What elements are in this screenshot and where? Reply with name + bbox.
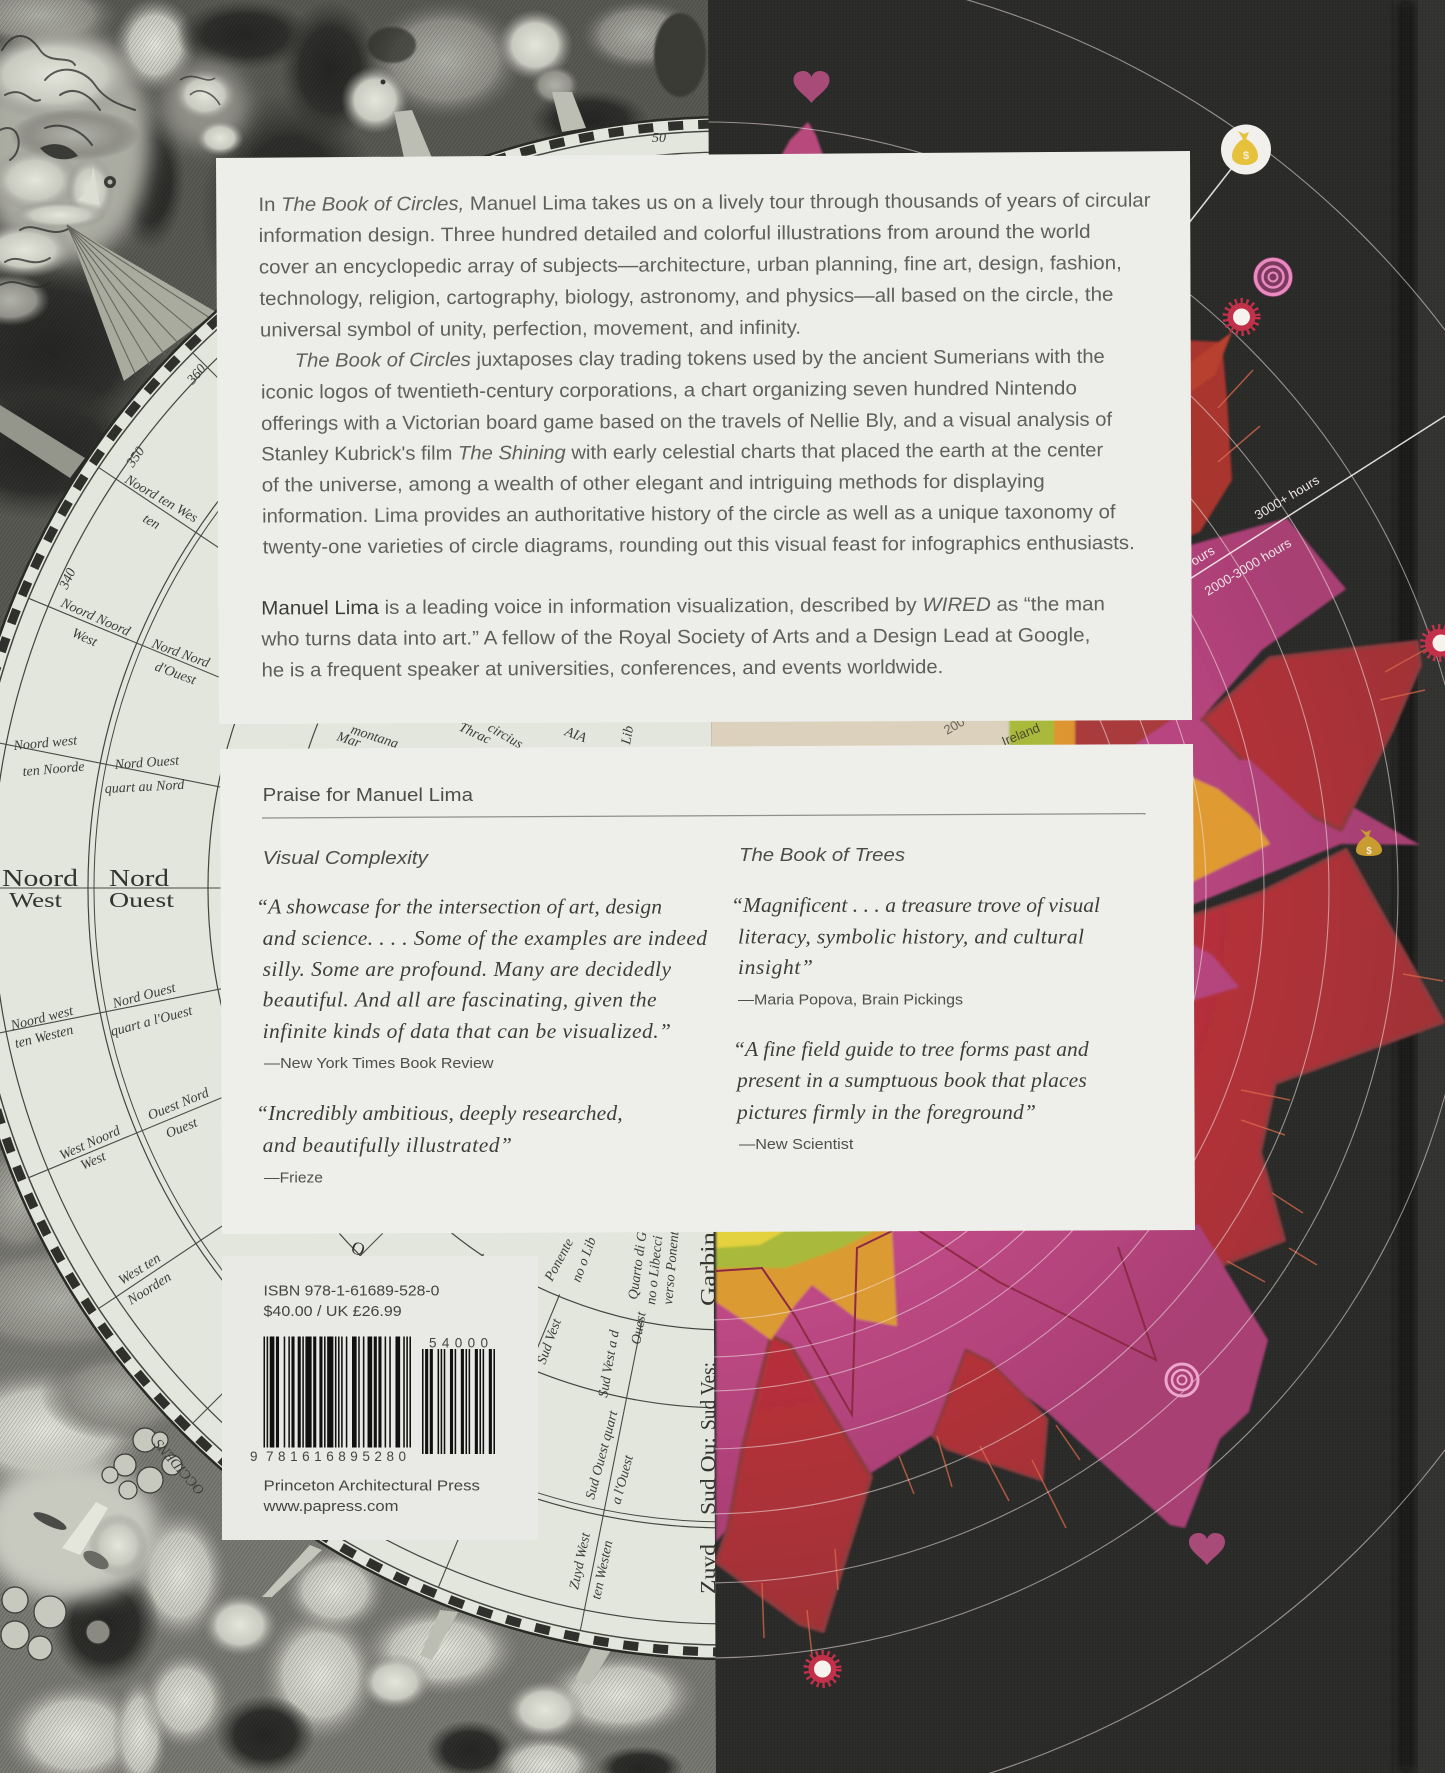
column: Visual Complexity: beautiful. And all are fascinating, given the <box>263 988 657 1012</box>
text: ISBN and price: ISBN 978-1-61689-528-0 <box>264 1282 439 1300</box>
column: Visual Complexity: Visual Complexity <box>263 847 430 868</box>
icon: heart bottom <box>1189 1533 1225 1565</box>
axis lines <box>1185 150 1445 582</box>
map labels: Nord Nord <box>149 636 212 672</box>
text: publisher <box>262 1478 480 1515</box>
text block: book description: cover an encyclopedic array of subjects—architecture, urban planning, fine art, design, fashion, <box>259 252 1122 278</box>
map labels: verso Ponente <box>661 1225 683 1305</box>
map labels: West <box>69 626 100 651</box>
flowers <box>1 1428 182 1660</box>
column: The Book of Trees: pictures firmly in the foreground” <box>735 1100 1036 1124</box>
map labels: Sud Vest <box>535 1316 565 1366</box>
wind beams <box>0 92 586 478</box>
map labels: Zuyd <box>696 1543 720 1594</box>
map labels: Ouest <box>109 888 174 912</box>
icon: heart top <box>794 71 830 103</box>
column: Visual Complexity: infinite kinds of data that can be visualized.” <box>263 1019 671 1043</box>
map labels: Nord <box>109 866 169 892</box>
map labels: Noord ten Wes <box>121 472 200 526</box>
map labels: no o Lib <box>570 1235 600 1284</box>
map labels: Noord west <box>12 733 79 754</box>
column: The Book of Trees: present in a sumptuous book that places <box>735 1068 1087 1092</box>
barcode: 54000 <box>429 1336 488 1350</box>
map labels: d'Ouest <box>153 660 199 689</box>
column: The Book of Trees: literacy, symbolic history, and cultural <box>738 925 1084 949</box>
column: The Book of Trees: —Maria Popova, Brain Pickings <box>738 993 963 1009</box>
map labels: AIA <box>562 724 589 746</box>
icon: money bag right <box>1356 829 1382 857</box>
pink small tip <box>1180 938 1239 1004</box>
map labels: Sud Ves: <box>696 1362 720 1430</box>
red lower right petal <box>1180 850 1443 1265</box>
text block: book description: of the universe, among a wealth of other elegant and intriguing methods for displaying <box>262 471 1045 496</box>
petal chart <box>708 0 1445 1773</box>
third face <box>341 27 416 134</box>
column: Visual Complexity: “Incredibly ambitious, deeply researched, <box>256 1101 623 1125</box>
column: Visual Complexity: —New York Times Book Review <box>264 1056 494 1072</box>
map labels: a l'Ouest <box>609 1453 637 1506</box>
map labels: ten Westen <box>13 1023 75 1052</box>
big wind god face <box>0 30 150 326</box>
map labels: Sud Vest a d <box>596 1328 623 1399</box>
icon: money bag in white circle <box>1221 124 1271 174</box>
map labels: 360 <box>184 362 210 388</box>
fifth face <box>654 13 706 97</box>
lower face <box>0 1460 158 1600</box>
column: The Book of Trees: The Book of Trees <box>739 844 905 865</box>
map labels: no o Libecci <box>644 1235 666 1305</box>
small lower faces <box>202 1545 620 1740</box>
column: The Book of Trees: “Magnificent . . . a treasure trove of visual <box>731 893 1100 917</box>
hours labels <box>941 472 1322 749</box>
map labels: quart au Nord <box>104 778 186 797</box>
column: Visual Complexity: silly. Some are profound. Many are decidedly <box>263 957 671 981</box>
green base <box>716 1228 880 1268</box>
text block: book description: information design. Three hundred detailed and colorful illustrations from around the world <box>259 221 1091 247</box>
text block: author bio <box>260 593 1105 682</box>
map labels <box>2 131 720 1601</box>
text block: book description: Stanley Kubrick's film The Shining with early celestial charts that placed the earth at the center <box>261 439 1104 465</box>
concentric rings <box>708 0 1445 1773</box>
map labels: Zuyd West <box>567 1530 594 1591</box>
text block: author bio: Manuel Lima is a leading voice in information visualization, described by WIRED as “the man <box>261 593 1105 619</box>
column: The Book of Trees: —New Scientist <box>739 1137 853 1153</box>
map labels: Ponente <box>542 1236 577 1285</box>
text: publisher: www.papress.com <box>262 1498 398 1515</box>
text block: book description: twenty-one varieties of circle diagrams, rounding out this visual feast for infographics enthusiasts. <box>263 532 1135 558</box>
map labels: Ouest <box>629 1310 650 1346</box>
map labels: Sud Ou: <box>696 1437 720 1515</box>
column: The Book of Trees: insight” <box>738 955 813 979</box>
text block: book description: offerings with a Victorian board game based on the travels of Nellie Bly, and a visual analysis of <box>261 409 1113 435</box>
column: Visual Complexity: and science. . . . Some of the examples are indeed <box>263 926 707 950</box>
map labels: quart a l'Ouest <box>109 1003 195 1040</box>
text block: book description: universal symbol of unity, perfection, movement, and infinity. <box>260 317 801 341</box>
map labels: Ouest <box>164 1115 201 1142</box>
hours labels: Ireland <box>1000 720 1042 749</box>
column: The Book of Trees: “A fine field guide to tree forms past and <box>733 1037 1089 1061</box>
second face <box>163 63 247 156</box>
map labels: Nord Ouest <box>113 753 181 773</box>
map labels: Quarto di Gar <box>626 1218 652 1301</box>
pink top tip <box>780 122 824 158</box>
text: ISBN and price: $40.00 / UK £26.99 <box>264 1303 402 1320</box>
map strip colours <box>711 720 1182 746</box>
map labels: circius <box>485 720 526 753</box>
map labels: ten Noorde <box>22 760 85 780</box>
top clouds <box>0 0 700 520</box>
icon: starburst bottom <box>808 1655 836 1683</box>
map labels: 50 <box>652 131 666 146</box>
map labels: Noord Noord <box>57 596 133 640</box>
map labels: Ouest Nord <box>146 1085 212 1124</box>
text block: book description: The Book of Circles juxtaposes clay trading tokens used by the ancient Sumerians with the <box>295 346 1105 372</box>
text block: book description: information. Lima provides an authoritative history of the circle as well as a unique taxonomy of <box>262 501 1116 527</box>
hours labels: 200 <box>941 714 967 738</box>
icon: target lower <box>1166 1364 1198 1396</box>
icon: starburst top <box>1228 303 1256 331</box>
map labels: Thrac <box>456 720 494 748</box>
icon: starburst right <box>1425 629 1445 657</box>
orange base <box>716 1230 897 1340</box>
map labels: OCCIDENS <box>152 1436 208 1497</box>
barcode <box>250 1336 495 1464</box>
panel: praise <box>220 744 1195 1234</box>
pink wedge <box>1180 518 1420 910</box>
panel: ISBN and barcode <box>222 1256 538 1540</box>
map labels: Garbin <box>696 1231 720 1306</box>
icon: money bag right: $ <box>1366 846 1372 857</box>
hours labels: 2000-3000 hours <box>1202 535 1294 599</box>
hours labels: 3000+ hours <box>1252 472 1322 523</box>
heading: praise: Praise for Manuel Lima <box>263 784 474 805</box>
map labels: Lib <box>619 725 637 747</box>
map labels: West ten <box>116 1251 164 1288</box>
map labels: Nord Ouest <box>110 980 178 1012</box>
red petal right <box>1203 642 1420 830</box>
pink lower petal <box>716 1225 1268 1542</box>
map labels: montana <box>349 723 400 752</box>
text block: author bio: who turns data into art.” A fellow of the Royal Society of Arts and a Design Lead at Google, <box>260 624 1090 651</box>
spikes <box>762 370 1443 1655</box>
text block: book description: In The Book of Circles, Manuel Lima takes us on a lively tour through thousands of years of circular <box>258 189 1151 216</box>
text: publisher: Princeton Architectural Press <box>264 1478 480 1494</box>
map labels: Noord west <box>8 1004 76 1034</box>
map labels: 350 <box>123 444 148 471</box>
red upper petal <box>1190 339 1234 537</box>
fourth face <box>497 9 579 105</box>
red lower petal <box>716 1336 871 1631</box>
barcode: 9 <box>250 1449 258 1464</box>
column: Visual Complexity: and beautifully illustrated” <box>263 1133 512 1157</box>
text: ISBN and price <box>264 1282 439 1320</box>
barcode: 781616895280 <box>266 1449 406 1464</box>
icon: target top <box>1253 257 1293 297</box>
map labels: West <box>9 888 62 912</box>
map labels: 340 <box>57 566 80 593</box>
orange shape <box>1193 776 1271 883</box>
red middle petal <box>933 1350 1047 1480</box>
map labels: Noorden <box>124 1270 174 1309</box>
map labels: ten Westen <box>589 1539 616 1601</box>
text block: book description <box>258 189 1153 558</box>
engraving: wind gods and clouds <box>0 0 730 1773</box>
map labels: Sud Ouest quart <box>583 1408 622 1501</box>
map labels: Mar <box>334 729 363 751</box>
column: Visual Complexity <box>256 847 707 1186</box>
text block: book description: technology, religion, cartography, biology, astronomy, and physics—all based on the circle, the <box>259 284 1113 310</box>
map labels: ten <box>140 511 162 533</box>
text block: book description: iconic logos of twentieth-century corporations, a chart organizing seven hundred Nintendo <box>261 377 1077 403</box>
map labels: West <box>79 1149 109 1174</box>
hours labels: ours <box>1188 542 1218 569</box>
column: The Book of Trees <box>731 844 1100 1153</box>
column: Visual Complexity: “A showcase for the intersection of art, design <box>256 894 662 918</box>
map labels: Noord <box>2 866 78 892</box>
trend line <box>716 1231 892 1415</box>
bottom clouds <box>0 1140 700 1773</box>
panel: description <box>216 151 1192 724</box>
text block: author bio: he is a frequent speaker at universities, conferences, and events worldwide. <box>262 656 943 681</box>
map labels: West Noord <box>58 1123 124 1164</box>
map labels: O <box>349 1237 368 1260</box>
column: Visual Complexity: —Frieze <box>264 1170 323 1186</box>
dark cloth right half <box>708 0 1445 1773</box>
icon: money bag in white circle: $ <box>1243 150 1249 162</box>
